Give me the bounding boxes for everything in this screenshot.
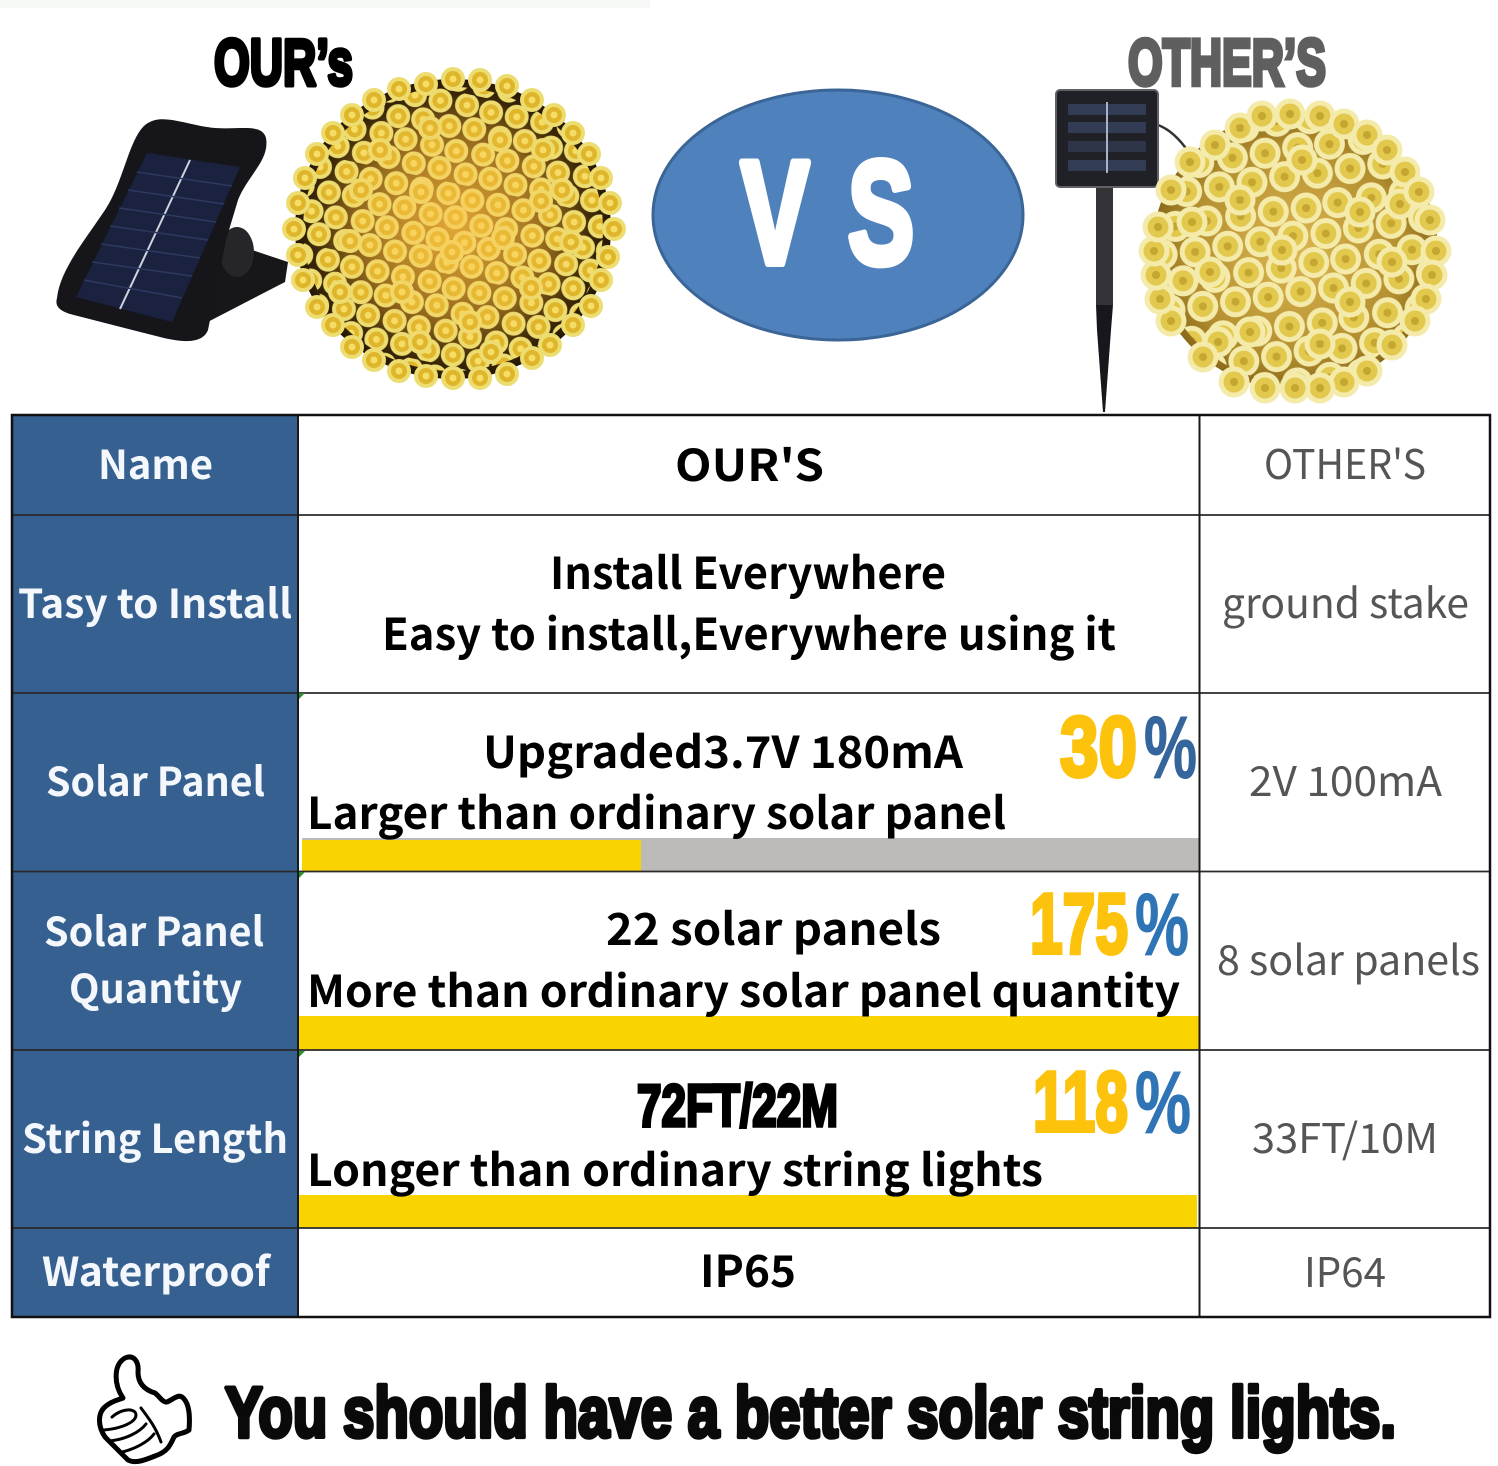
- stat: 118%: 118: [1033, 1055, 1128, 1150]
- comparison table: [12, 415, 1490, 1317]
- row: String Length: [22, 1053, 1438, 1199]
- row: Waterproof: IP65: [700, 1236, 796, 1300]
- row: Solar Panel: Solar Panel: [46, 750, 265, 808]
- bar: solar panel 30%: [302, 838, 1199, 871]
- bar: string length 118%: [299, 1195, 1197, 1228]
- badge: VS ellipse: S: [848, 131, 914, 294]
- row: Solar Panel Quantity: Quantity: [69, 957, 242, 1015]
- row: Solar Panel Quantity: 22 solar panels: [606, 894, 941, 958]
- row: Name: OUR'S: [675, 430, 824, 494]
- badge: VS ellipse: [653, 90, 1023, 340]
- icon: other's stake solar panel: [1056, 90, 1192, 412]
- row: Name: [98, 430, 1426, 494]
- row: Easy to install: Install Everywhere: [550, 538, 946, 602]
- row: Solar Panel Quantity: Solar Panel: [44, 900, 264, 958]
- stat: 175%: %: [1135, 875, 1189, 974]
- row: Solar Panel Quantity: [44, 875, 1480, 1020]
- row: String Length: Longer than ordinary string lights: [307, 1135, 1043, 1199]
- row: Easy to install: ground stake: [1222, 570, 1469, 630]
- row: Name: Name: [98, 433, 213, 491]
- icon: our clip-on solar panel: [56, 119, 288, 341]
- heading: OTHER'S: OTHER’S: [1128, 25, 1326, 99]
- heading: OUR's: OUR’s: [214, 25, 353, 99]
- row: Solar Panel: Upgraded3.7V 180mA: [483, 717, 964, 781]
- row: Waterproof: IP64: [1304, 1239, 1386, 1299]
- image: other's LED light ball: [1138, 98, 1452, 404]
- bar: solar panel quantity 175%: [299, 1016, 1199, 1050]
- row: Solar Panel: [46, 698, 1442, 842]
- badge: VS ellipse: V: [741, 131, 809, 294]
- stat: 175%: 175: [1030, 877, 1128, 972]
- stat: 30%: 30: [1060, 700, 1137, 795]
- row: String Length: 72FT/22M: [637, 1073, 838, 1139]
- row: Waterproof: Waterproof: [42, 1240, 272, 1298]
- row: Solar Panel: 2V 100mA: [1249, 748, 1442, 808]
- row: Waterproof: [42, 1236, 1386, 1300]
- image: our LED light ball: [282, 67, 626, 390]
- row: Solar Panel Quantity: More than ordinary solar panel quantity: [307, 956, 1180, 1020]
- stat: 118%: %: [1135, 1053, 1191, 1152]
- stat: 30%: %: [1144, 698, 1197, 797]
- icon: thumbs up: [99, 1357, 189, 1462]
- row: Solar Panel: Larger than ordinary solar panel: [307, 778, 1006, 842]
- stat: 30%: [1060, 698, 1197, 797]
- row: Name: OTHER'S: [1264, 431, 1426, 491]
- row: String Length: String Length: [22, 1107, 288, 1165]
- row: Easy to install: Tasy to Install: [18, 572, 292, 630]
- row: Easy to install: Easy to install,Everywhere using it: [382, 599, 1116, 663]
- row: String Length: 33FT/10M: [1252, 1105, 1438, 1165]
- row: Solar Panel Quantity: 8 solar panels: [1217, 927, 1480, 987]
- row: Easy to install: [18, 538, 1469, 663]
